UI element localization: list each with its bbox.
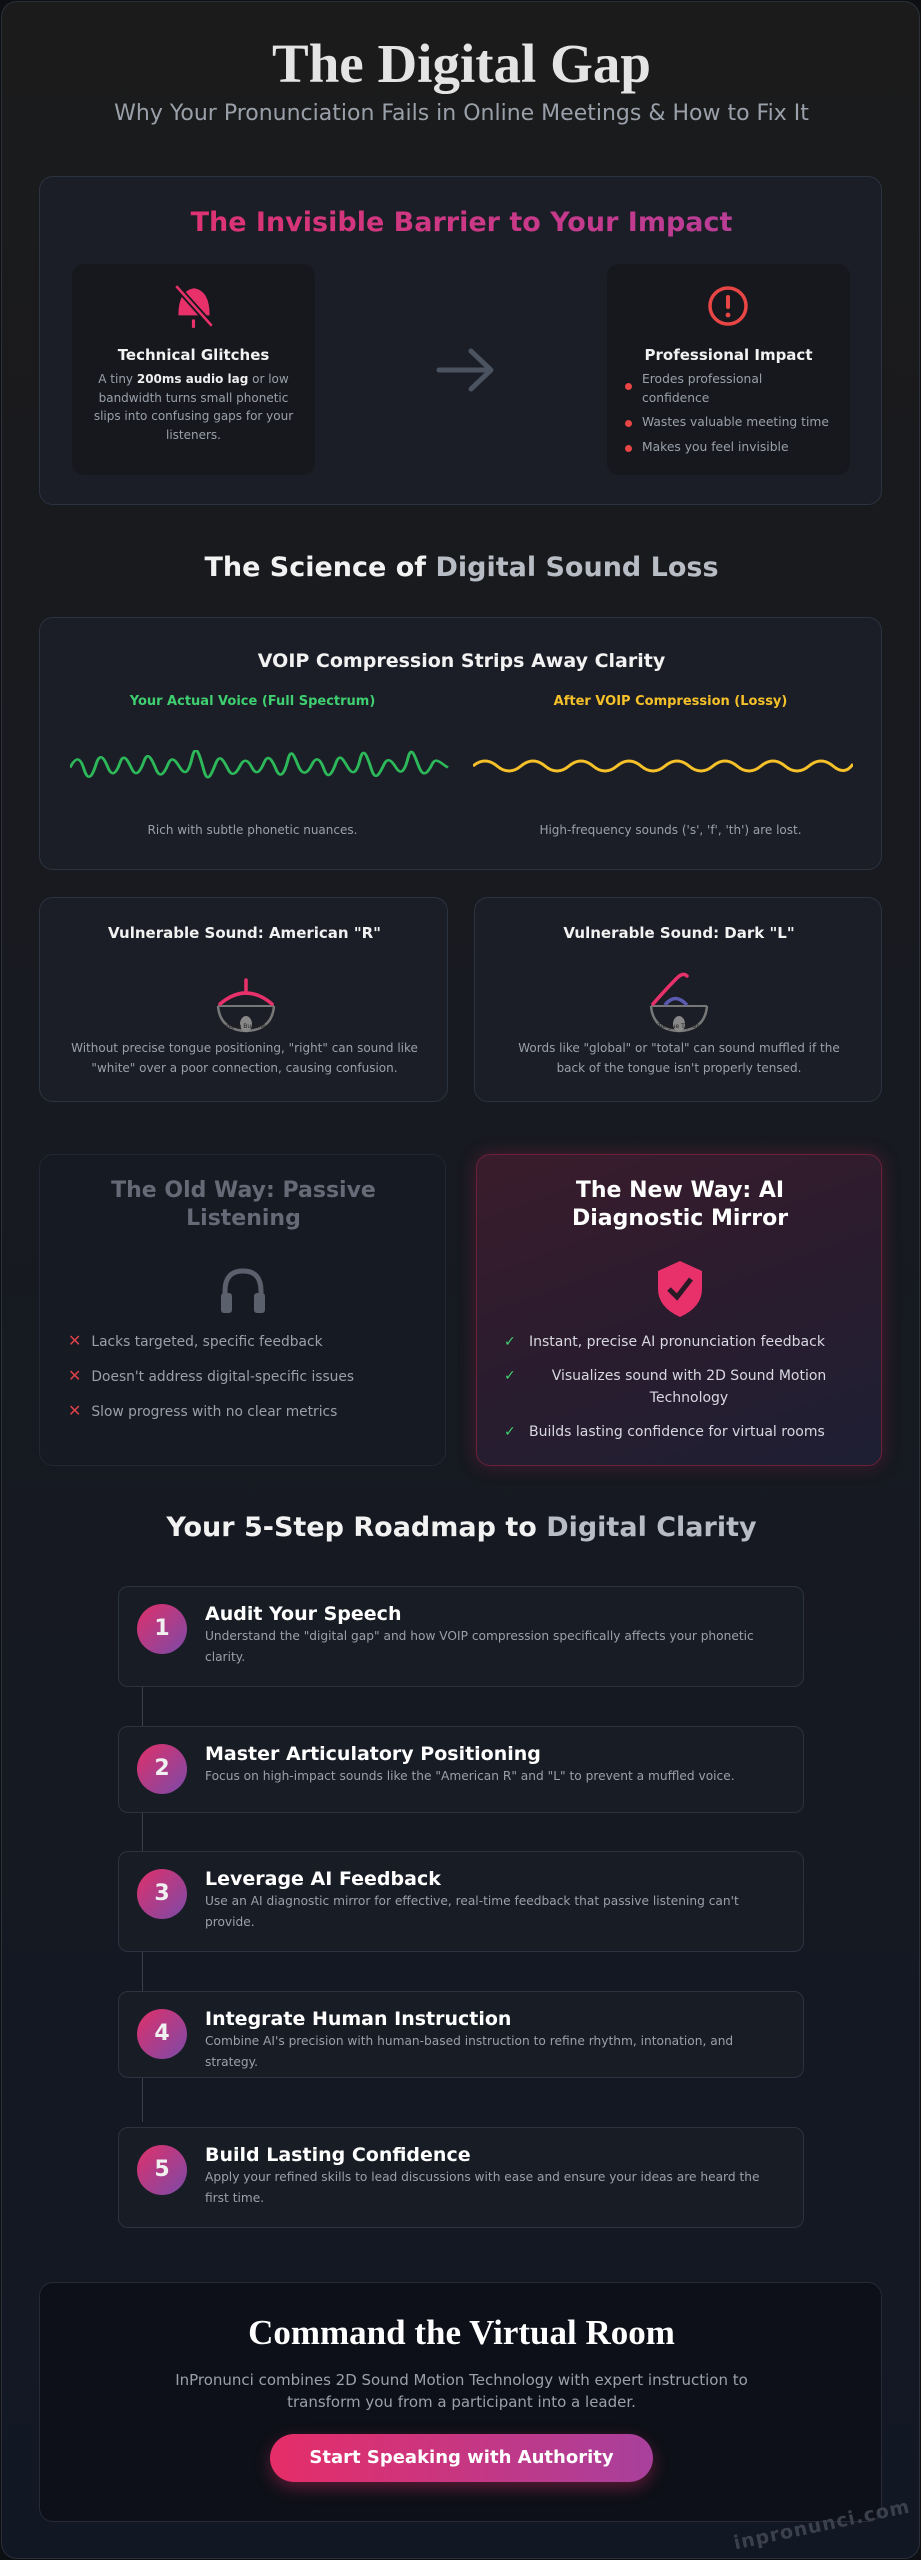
number badge [137,1744,187,1794]
panel: old way [39,1154,446,1466]
card text: Words like "global" or "total" can sound muffled if the back of the tongue isn't properly tensed. [518,1041,840,1075]
bullet list [625,372,829,454]
step 2 [118,1726,804,1813]
list: benefits: Visualizes sound with 2D Sound Motion Technology [552,1368,826,1406]
step title: Leverage AI Feedback [205,1868,441,1890]
bullet list: Erodes professional confidence [642,372,762,404]
list: drawbacks: ✕ Slow progress with no clear metrics [68,1401,337,1420]
step title: Master Articulatory Positioning [205,1743,541,1765]
CTA text: InPronunci combines 2D Sound Motion Technology with expert instruction to transform you from a participant into a leader. [175,2371,748,2411]
card title: Technical Glitches [118,346,269,364]
button: Start Speaking with Authority [309,2447,614,2468]
step text: Apply your refined skills to lead discussions with ease and ensure your ideas are heard the first time. [205,2170,759,2205]
icon: shield check [658,1261,702,1317]
list: benefits: ✓ [504,1368,516,1384]
number badge: 4 [154,2021,170,2046]
caption right: High-frequency sounds ('s', 'f', 'th') are lost. [539,823,802,837]
number badge [137,1869,187,1919]
title: The Digital Gap [272,33,651,94]
chart: full waveform [70,750,449,778]
heading: Listening [186,1206,301,1231]
arrow [436,348,494,392]
step 5 [118,2127,804,2228]
step title: Build Lasting Confidence [205,2144,471,2166]
heading: The New Way: AI [576,1178,784,1203]
step text: Understand the "digital gap" and how VOIP compression specifically affects your phonetic clarity. [205,1629,754,1664]
watermark: inpronunci.com [732,2496,912,2554]
caption left: Rich with subtle phonetic nuances. [148,823,357,837]
card title: Vulnerable Sound: American "R" [108,924,381,942]
icon: tongue bunched [216,978,276,1032]
card: technical glitches [72,264,315,475]
subtitle: Why Your Pronunciation Fails in Online Meetings & How to Fix It [114,101,809,126]
number badge: 3 [154,1881,170,1906]
number badge [137,2145,187,2195]
list: drawbacks: ✕ Lacks targeted, specific feedback [68,1331,323,1350]
label: compressed: After VOIP Compression (Lossy) [554,694,787,709]
icon: headphones [221,1268,265,1313]
bullet list: Wastes valuable meeting time [642,415,829,429]
heading: science: The Science of Digital Sound Loss [204,552,719,583]
panel title: VOIP Compression Strips Away Clarity [258,650,665,672]
card: professional impact [607,264,850,475]
panel: CTA [39,2282,882,2522]
number badge: 5 [154,2157,170,2182]
heading [111,1178,376,1231]
list: benefits: ✓ [504,1424,516,1440]
card title: Professional Impact [644,346,812,364]
list: benefits: ✓ [504,1334,516,1350]
heading: The Old Way: Passive [111,1178,376,1203]
list: benefits: Instant, precise AI pronunciation feedback [529,1334,825,1350]
heading: invisible barrier [40,207,883,238]
icon: tongue tip up: Tongue Tip Up [657,1023,700,1030]
card text: A tiny 200ms audio lag or low bandwidth turns small phonetic slips into confusing gaps for your listeners. [94,372,293,442]
step title: Audit Your Speech [205,1603,401,1625]
step 4 [118,1991,804,2078]
panel: new way [476,1154,882,1466]
card title: Vulnerable Sound: Dark "L" [563,924,795,942]
panel: Dark L [474,897,882,1102]
step text: Focus on high-impact sounds like the "American R" and "L" to prevent a muffled voice. [205,1769,735,1783]
step 3 [118,1851,804,1952]
panel: invisible barrier [39,176,882,505]
heading: roadmap: Your 5-Step Roadmap to Digital Clarity [166,1512,757,1543]
list: drawbacks: ✕ Doesn't address digital-specific issues [68,1366,354,1385]
bullet list: Makes you feel invisible [642,440,789,454]
icon: alert circle [708,286,748,326]
list: benefits [504,1334,826,1440]
icon: tongue bunched: Tongue Bunched! [219,1023,272,1030]
step text: Combine AI's precision with human-based instruction to refine rhythm, intonation, and strategy. [205,2034,733,2069]
label: full spectrum: Your Actual Voice (Full Spectrum) [130,694,375,709]
step text: Use an AI diagnostic mirror for effective, real-time feedback that passive listening can't provide. [205,1894,739,1929]
chart: compressed waveform [473,760,853,772]
panel: American R [39,897,448,1102]
list: drawbacks [68,1331,354,1420]
connector line [142,1682,143,2122]
step 1 [118,1586,804,1687]
heading: Diagnostic Mirror [572,1206,788,1231]
icon: muted bell [175,285,213,328]
button [270,2434,653,2482]
list: benefits: Builds lasting confidence for virtual rooms [529,1424,825,1440]
card text: Without precise tongue positioning, "right" can sound like "white" over a poor connection, causing confusion. [71,1041,418,1075]
number badge [137,1604,187,1654]
number badge: 1 [154,1616,170,1641]
number badge: 2 [154,1756,170,1781]
CTA title: Command the Virtual Room [248,2313,675,2352]
number badge [137,2009,187,2059]
panel: VOIP compression [39,617,882,870]
icon: tongue tip up [650,972,708,1032]
heading [572,1178,788,1231]
step title: Integrate Human Instruction [205,2008,511,2030]
